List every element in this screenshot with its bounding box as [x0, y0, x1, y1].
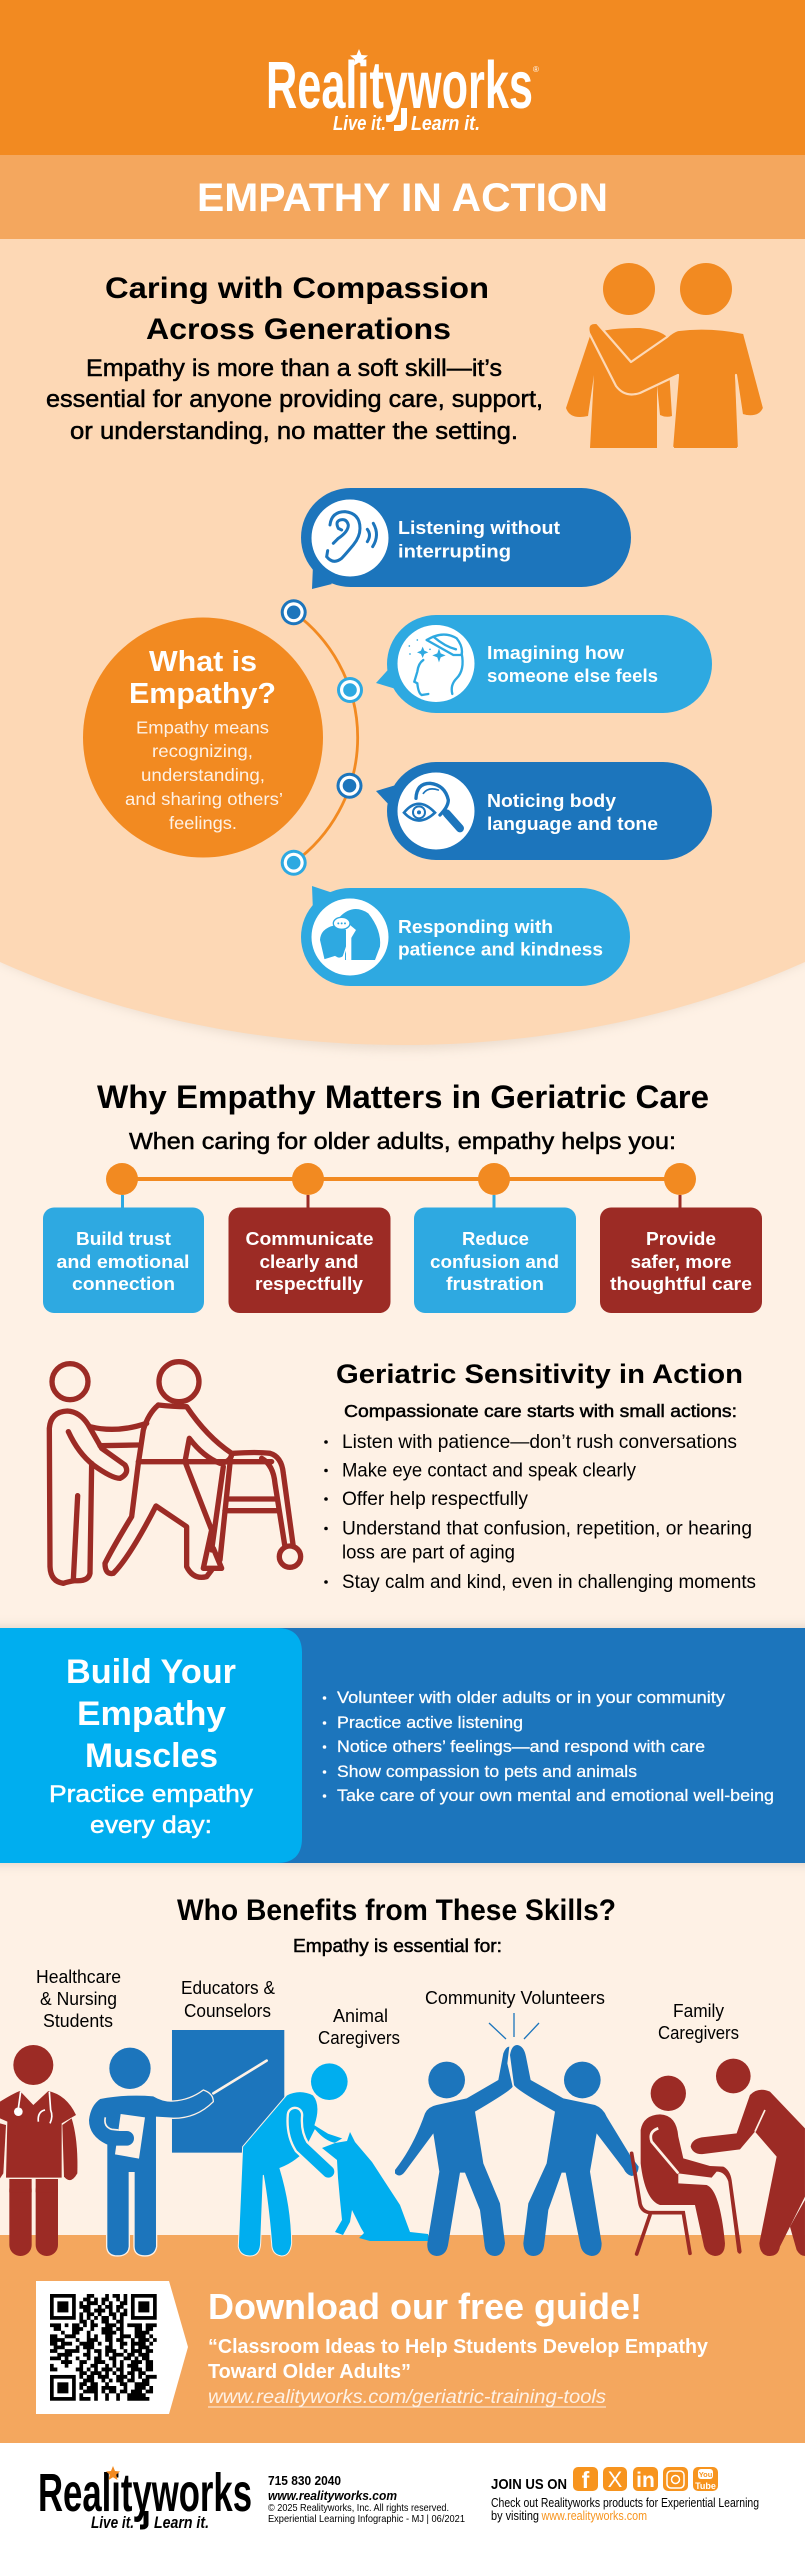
panel: build your empathy muscles: every day:: [90, 1812, 212, 1839]
benefit box: build trust: Build trust: [76, 1228, 171, 1249]
left volunteer: [395, 2047, 513, 2256]
subheading: when caring: When caring for older adults, empathy helps you:: [129, 1128, 676, 1154]
figure: teacher with board: [88, 2030, 284, 2256]
icon: youtube: [693, 2467, 718, 2491]
logo wordmark: Realityworks: [266, 48, 533, 123]
icon: two people embracing: [566, 263, 764, 448]
footer note: [491, 2496, 759, 2523]
icon: x: X: [608, 2467, 623, 2492]
icon: youtube: Tube: [695, 2481, 716, 2491]
title: EMPATHY IN ACTION: [197, 176, 608, 220]
panel: build your empathy muscles: [0, 1628, 805, 1863]
benefit box: provide: [600, 1208, 762, 1313]
benefit box: provide: Provide: [646, 1228, 716, 1249]
label: healthcare and nursing students: Healthcare: [36, 1967, 121, 1987]
panel: build your empathy muscles: Muscles: [85, 1737, 218, 1775]
icon: head with stars: [408, 635, 463, 695]
what is empathy circle: What is: [149, 646, 257, 678]
speech bubble: listening: [301, 488, 631, 589]
contact block: www.realityworks.com: [268, 2488, 397, 2503]
icon: ear: [327, 512, 376, 561]
contact block: Experiential Learning Infographic - MJ | 06/2021: [268, 2513, 465, 2525]
connector arc: [294, 612, 358, 863]
label: animal caregivers: [318, 2006, 400, 2048]
bullet list: geriatric sensitivity: Make eye contact and speak clearly: [342, 1460, 636, 1481]
footer panel: [0, 2443, 805, 2560]
icon: instagram: [663, 2467, 688, 2491]
label: animal caregivers: Caregivers: [318, 2028, 400, 2048]
bubble text: Listening without: [398, 517, 560, 538]
contact block: [268, 2474, 465, 2525]
panel: build your empathy muscles: Practice empathy: [49, 1781, 253, 1808]
benefit box: reduce: confusion and: [430, 1251, 559, 1272]
heading: geriatric sensitivity: Geriatric Sensitivity in Action: [336, 1359, 743, 1389]
illustration: caregiver helping older adult with walker: [49, 1362, 301, 1583]
icon: dog: [322, 2132, 429, 2241]
intro text block: essential for anyone providing care, support,: [46, 386, 543, 413]
label: educators and counselors: Educators &: [181, 1978, 275, 1998]
header band with logo: [0, 0, 805, 155]
intro text block: [46, 355, 543, 445]
label: family caregivers: [658, 2001, 739, 2043]
join us on: JOIN US ON: [491, 2476, 567, 2493]
footer logo: Realityworks: [38, 2463, 252, 2523]
contact block: © 2025 Realityworks, Inc. All rights reserved.: [268, 2502, 449, 2514]
speech bubble: imagining: [376, 615, 712, 713]
figure: high-five volunteers: [395, 2013, 639, 2256]
bullet list: geriatric sensitivity: Offer help respectfully: [342, 1489, 528, 1510]
bubble text: Imagining how: [487, 642, 625, 663]
label: healthcare and nursing students: [36, 1967, 121, 2031]
icon: two heads talking: [319, 909, 380, 960]
what is empathy circle: feelings.: [169, 813, 237, 833]
label: family caregivers: Caregivers: [658, 2023, 739, 2043]
benefit box: communicate: [228, 1208, 390, 1313]
label: educators and counselors: Counselors: [184, 2001, 271, 2021]
benefit box: reduce: frustration: [446, 1273, 544, 1294]
subheading: compassionate care: Compassionate care starts with small actions:: [344, 1401, 737, 1421]
download call to action: [208, 2286, 709, 2408]
bullet list: geriatric sensitivity: Understand that confusion, repetition, or hearing: [342, 1519, 752, 1540]
bullet list: geriatric sensitivity: [324, 1432, 756, 1593]
icon: x: [603, 2467, 627, 2492]
download call to action: Toward Older Adults”: [208, 2360, 411, 2383]
logo star: [350, 49, 368, 66]
bullet list: practice empathy: Volunteer with older adults or in your community: [337, 1689, 726, 1707]
what is empathy circle: understanding,: [141, 765, 265, 785]
bullet list: practice empathy: Practice active listening: [337, 1714, 523, 1732]
bubble text: Noticing body: [487, 790, 617, 811]
label: community volunteers: Community Volunteers: [425, 1988, 605, 2008]
title band: [0, 155, 805, 239]
speech bubble: responding: patience and kindness: [398, 938, 603, 960]
benefit box: communicate: clearly and: [260, 1251, 358, 1272]
speech bubble: imagining: someone else feels: [487, 665, 658, 686]
icon: facebook: [573, 2467, 598, 2493]
what is empathy circle: [83, 618, 323, 858]
benefit box: build trust: connection: [72, 1273, 175, 1294]
footer note: www.realityworks.com: [541, 2509, 647, 2523]
panel: intro peach curved background: [0, 239, 805, 1050]
what is empathy circle: Empathy?: [129, 678, 276, 710]
bullet list: geriatric sensitivity: Listen with patience—don’t rush conversations: [342, 1432, 737, 1453]
timeline connector with dots: [106, 1163, 696, 1208]
icon: facebook: f: [582, 2467, 590, 2493]
download call to action: “Classroom Ideas to Help Students Develop Empathy: [208, 2335, 709, 2358]
footer note: Check out Realityworks products for Experiential Learning: [491, 2496, 759, 2510]
panel shadow: build muscles: [0, 1626, 805, 1865]
arc node 3: [336, 773, 362, 799]
intro text block: or understanding, no matter the setting.: [70, 418, 518, 445]
what is empathy circle: Empathy means: [136, 717, 269, 737]
icon: linkedin: [633, 2467, 658, 2492]
high-five sparks: [489, 2013, 539, 2039]
speech bubble: listening: interrupting: [398, 540, 511, 562]
benefit box: communicate: respectfully: [255, 1273, 364, 1294]
footer logo: Learn it.: [154, 2513, 209, 2532]
speech bubble: noticing: [376, 762, 712, 860]
what is empathy circle: and sharing others’: [125, 789, 283, 809]
speech bubble: responding: [301, 886, 630, 986]
figure: animal caregiver with dog: [238, 2063, 429, 2256]
figure: family caregivers with elder: [632, 2059, 805, 2256]
panel: build your empathy muscles: Build Your: [66, 1653, 236, 1691]
logo tail: [394, 108, 404, 128]
heading: caring with compassion: Caring with Compassion: [105, 272, 489, 305]
figure: nurse: [0, 2045, 77, 2256]
benefit box: reduce: [414, 1208, 576, 1313]
label: educators and counselors: [181, 1978, 275, 2021]
icon: youtube: You: [699, 2470, 713, 2479]
bullet list: practice empathy: Take care of your own mental and emotional well-being: [337, 1787, 774, 1805]
heading: who benefits: Who Benefits from These Skills?: [177, 1894, 616, 1927]
QR code panel: [36, 2281, 188, 2414]
label: healthcare and nursing students: & Nursing: [40, 1989, 117, 2009]
footer logo: [38, 2463, 252, 2532]
bubble text: Responding with: [398, 916, 553, 937]
label: family caregivers: Family: [673, 2001, 724, 2021]
subheading: empathy is essential for: Empathy is essential for:: [293, 1936, 502, 1956]
bullet list: practice empathy: Notice others’ feelings—and respond with care: [337, 1738, 705, 1756]
bullet list: practice empathy: Show compassion to pets and animals: [337, 1763, 637, 1781]
registered mark: ®: [533, 65, 539, 74]
benefit box: build trust: and emotional: [56, 1251, 190, 1272]
bullet list: geriatric sensitivity: Stay calm and kind, even in challenging moments: [342, 1572, 756, 1593]
benefit box: reduce: Reduce: [462, 1228, 529, 1249]
arc node 4: [281, 850, 307, 876]
icon: magnifier and eye: [404, 783, 460, 828]
benefit box: provide: thoughtful care: [610, 1273, 752, 1294]
what is empathy circle: recognizing,: [152, 741, 253, 761]
heading: caring with compassion: Across Generations: [146, 313, 451, 346]
footer logo: Live it.: [91, 2513, 134, 2532]
intro text block: Empathy is more than a soft skill—it’s: [86, 355, 502, 382]
speech bubble: noticing: language and tone: [487, 813, 658, 834]
QR code: [50, 2296, 157, 2399]
icon: linkedin: in: [636, 2469, 655, 2492]
footer note: by visiting: [491, 2509, 539, 2523]
download call to action: Download our free guide!: [208, 2286, 642, 2327]
benefit box: build trust: [43, 1208, 204, 1313]
arc node 2: [337, 677, 363, 703]
benefit box: communicate: Communicate: [246, 1228, 374, 1249]
arc node 1: [281, 599, 307, 625]
ground band and footer band: [0, 2235, 805, 2443]
bullet list: practice empathy: [323, 1689, 774, 1805]
label: healthcare and nursing students: Students: [43, 2011, 113, 2031]
download call to action: www.realityworks.com/geriatric-training-tools: [208, 2387, 607, 2408]
heading: caring with compassion: [105, 272, 489, 346]
contact block: 715 830 2040: [268, 2474, 341, 2488]
heading: why empathy matters: Why Empathy Matters in Geriatric Care: [97, 1079, 709, 1115]
label: animal caregivers: Animal: [333, 2006, 388, 2026]
bullet list: geriatric sensitivity: loss are part of aging: [342, 1543, 515, 1564]
right volunteer: [510, 2045, 639, 2256]
logo tagline: Live it.: [333, 113, 386, 135]
benefit box: provide: safer, more: [630, 1251, 732, 1272]
panel: build your empathy muscles: Empathy: [77, 1695, 226, 1733]
logo tagline 2: Learn it.: [411, 113, 480, 135]
